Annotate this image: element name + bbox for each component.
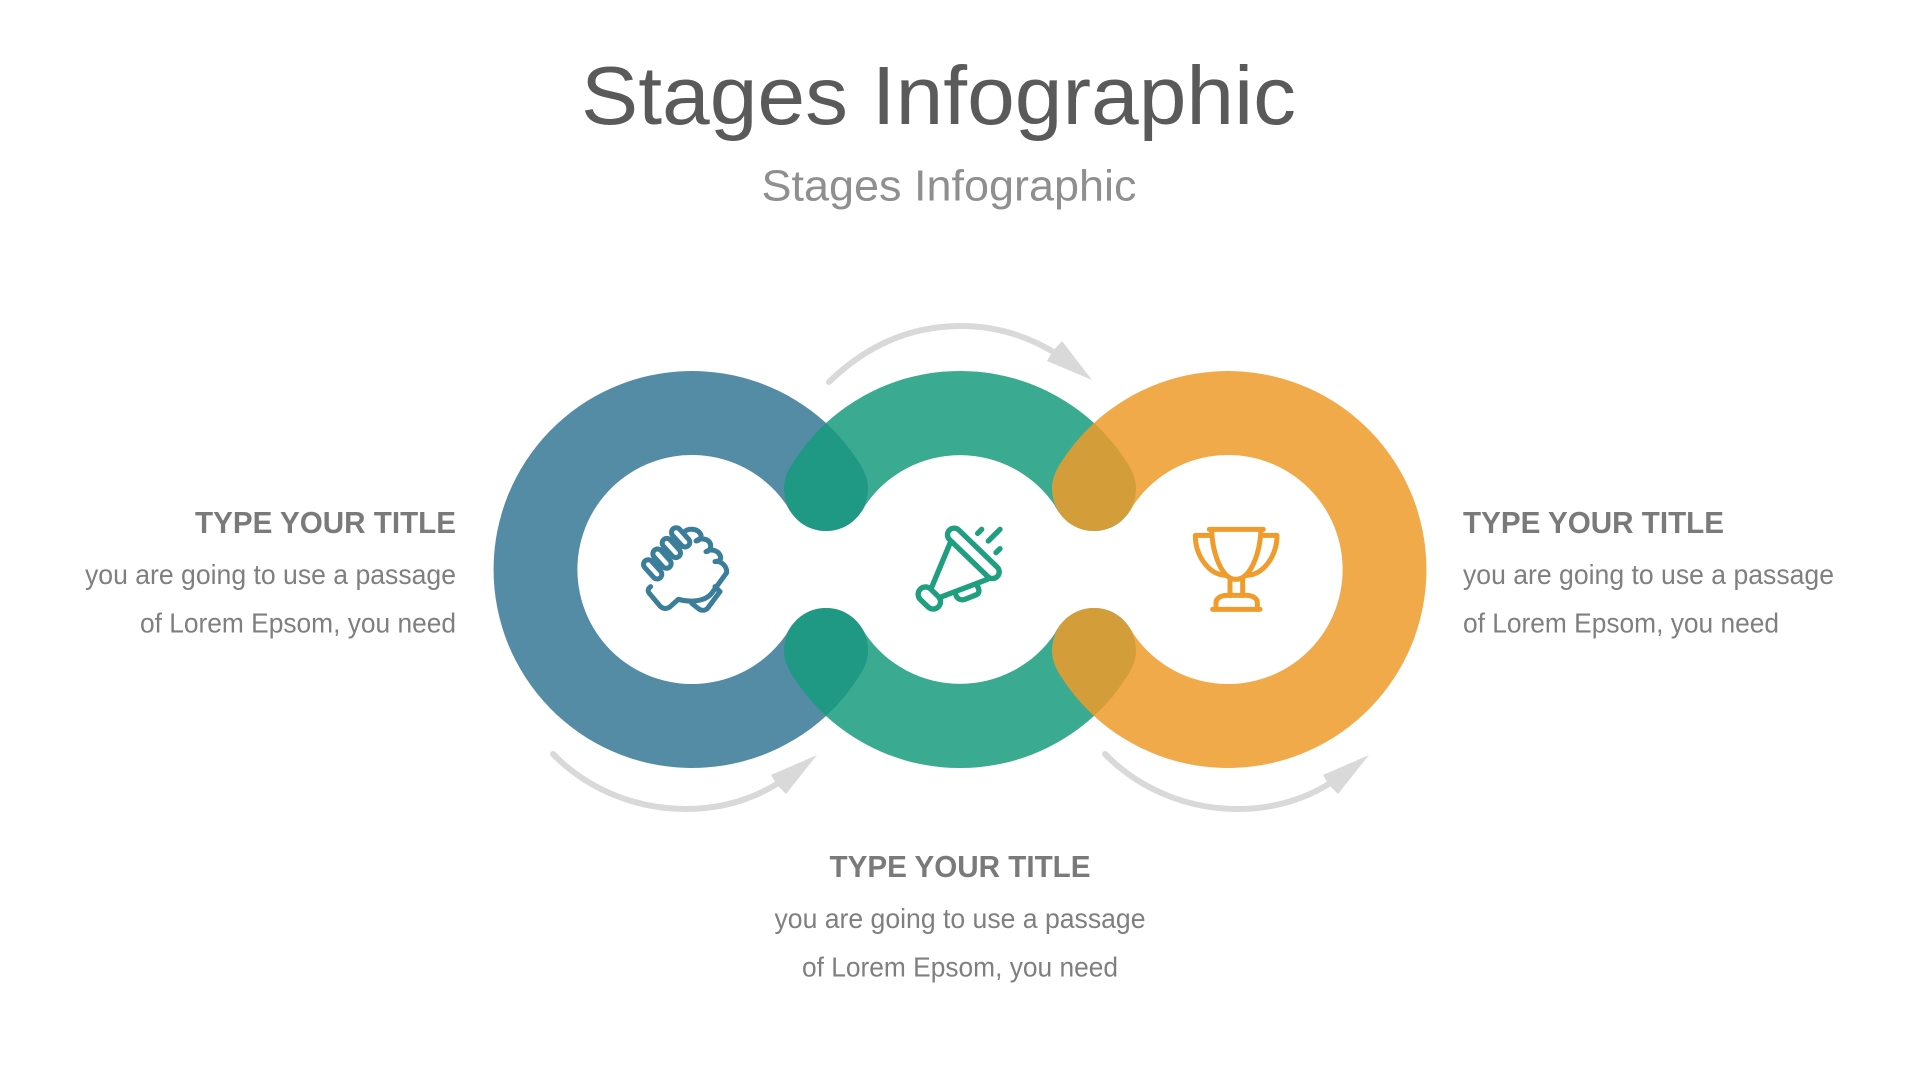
text block: right stage: of Lorem Epsom, you need: [1463, 608, 1779, 638]
ring: orange stage three: [1052, 371, 1426, 768]
title: Stages Infographic: [581, 49, 1296, 142]
icon: megaphone: [915, 525, 1002, 612]
text block: bottom stage: of Lorem Epsom, you need: [802, 952, 1118, 982]
arrow: bottom left, blue to green: [553, 754, 817, 809]
arrow: top, green to orange: [829, 326, 1092, 382]
ring: green stage two: [784, 371, 1136, 768]
text block: left stage: you are going to use a passage: [85, 559, 456, 590]
text block: right stage: [1463, 505, 1834, 638]
icon: trophy: [1195, 529, 1277, 609]
text block: left stage: of Lorem Epsom, you need: [140, 608, 456, 638]
text block: right stage: you are going to use a passage: [1463, 559, 1834, 590]
ring: blue stage one: [494, 371, 868, 768]
text block: bottom stage: you are going to use a passage: [774, 903, 1146, 934]
text block: left stage: TYPE YOUR TITLE: [195, 505, 456, 540]
text block: bottom stage: [774, 849, 1146, 982]
subtitle: Stages Infographic: [762, 162, 1136, 210]
text block: bottom stage: TYPE YOUR TITLE: [830, 849, 1090, 884]
text block: right stage: TYPE YOUR TITLE: [1463, 505, 1724, 540]
text block: left stage: [85, 505, 456, 638]
stage rings diagram: [494, 371, 1426, 768]
icon: handshake: [642, 526, 727, 610]
arrow: bottom right, green to orange: [1105, 754, 1369, 809]
